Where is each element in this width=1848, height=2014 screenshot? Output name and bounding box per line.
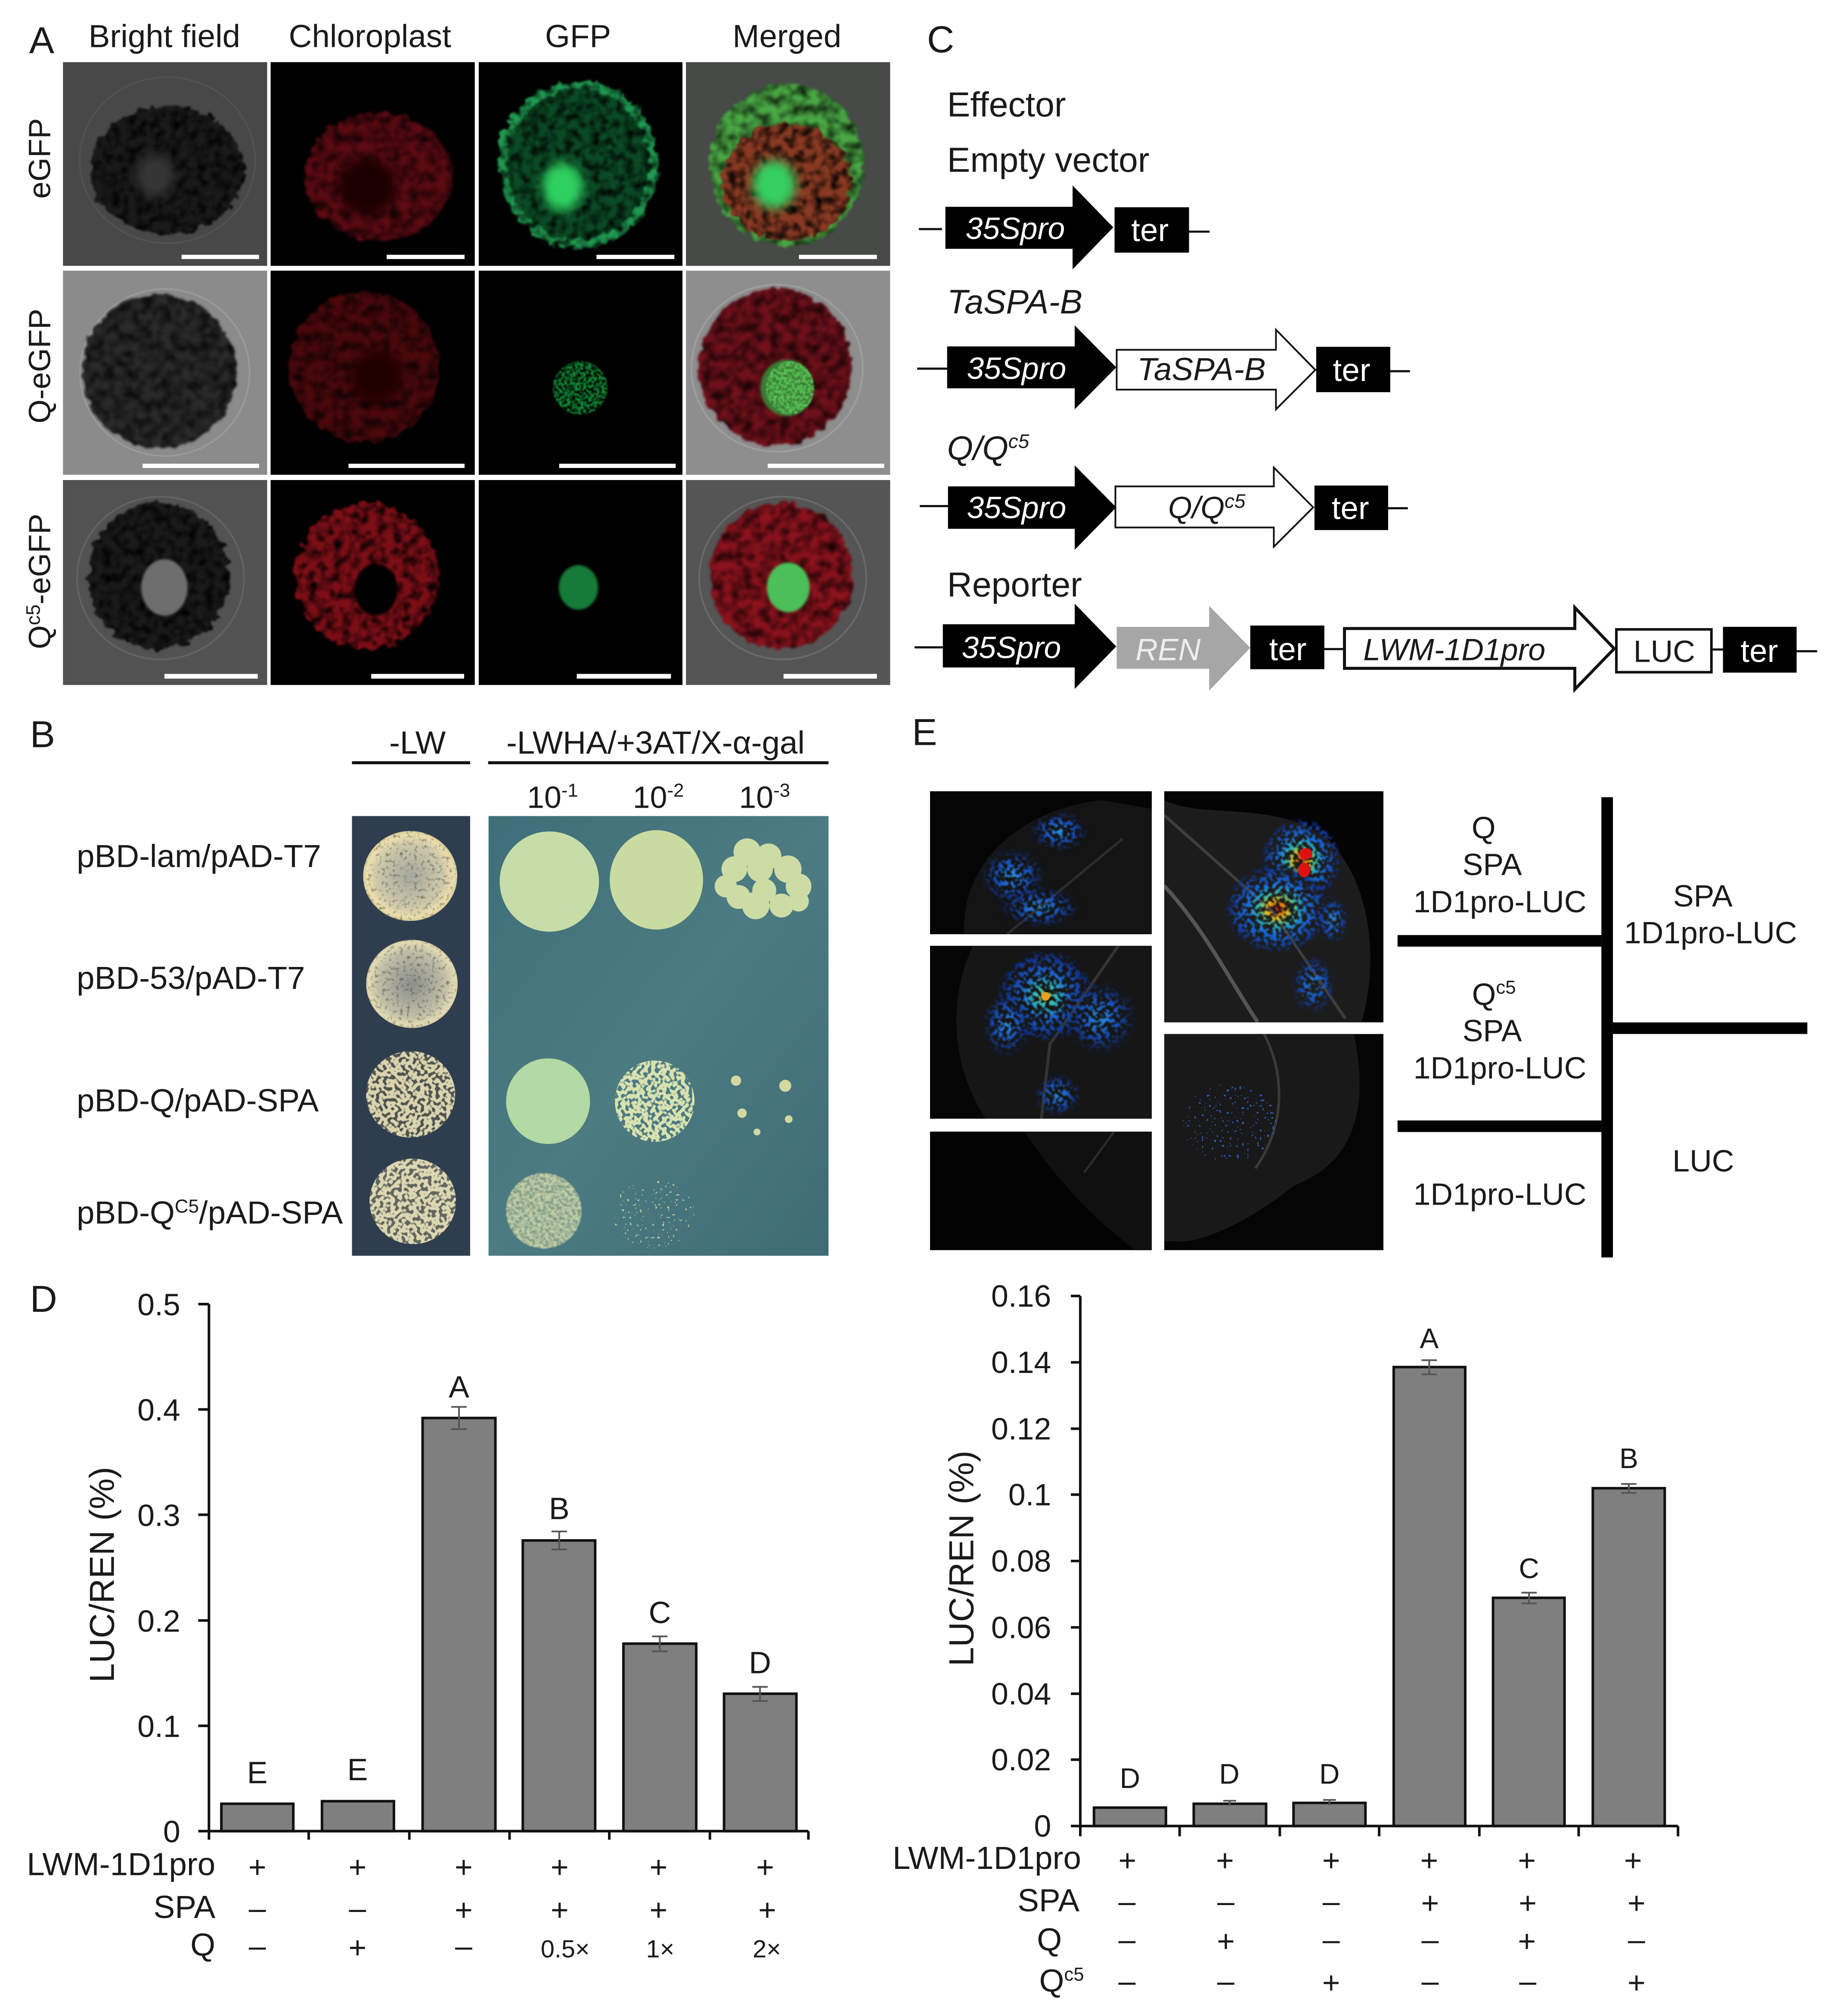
- construct: TaSPA-B: ter: [1333, 352, 1370, 388]
- construct: empty vector: 35Spro: [965, 211, 1065, 246]
- treatment table: 0.5×: [541, 1936, 590, 1963]
- heading: Q/Qc5: Q/Q: [947, 430, 1008, 467]
- significance letters: E: [347, 1753, 368, 1787]
- dilution label 10^-3: -3: [773, 780, 790, 801]
- treatment table: LWM-1D1pro: [893, 1840, 1081, 1876]
- micrograph: Qc5-eGFP GFP signal: [479, 480, 682, 685]
- error bars: [1223, 1360, 1637, 1806]
- y axis tick labels: 0.4: [137, 1393, 180, 1428]
- y axis tick labels: [991, 1279, 1051, 1844]
- label: Q SPA 1D1pro-LUC: SPA: [1463, 848, 1522, 882]
- significance letters: [1120, 1323, 1638, 1794]
- y axis tick labels: 0: [163, 1815, 180, 1849]
- treatment table: +: [455, 1850, 473, 1885]
- treatment table: +: [1421, 1886, 1439, 1921]
- construct: reporter: ter: [1740, 632, 1778, 669]
- micrograph: eGFP chloroplast: [270, 62, 475, 266]
- treatment table: +: [650, 1893, 667, 1927]
- underline -LWHA: [488, 761, 828, 764]
- dilution label 10^-2: -2: [667, 780, 684, 801]
- y axis title: LUC/REN (%): [83, 1467, 122, 1682]
- treatment table: 2×: [753, 1936, 781, 1963]
- treatment table: –: [1118, 1923, 1135, 1957]
- column heading: GFP: GFP: [545, 18, 611, 54]
- construct: TaSPA-B: 35Spro: [967, 351, 1066, 386]
- micrograph: eGFP bright field: [63, 62, 267, 266]
- micrograph: Qc5-eGFP bright field: [63, 480, 267, 685]
- label: Q SPA 1D1pro-LUC: [1414, 811, 1586, 919]
- treatment table: +: [1624, 1844, 1642, 1878]
- row label: pBD-Q/pAD-SPA: pBD-Q/pAD-SPA: [77, 1082, 319, 1119]
- treatment table: +: [1628, 1886, 1646, 1921]
- leaf image: 1D1pro-LUC: [930, 1131, 1152, 1250]
- heading: Q/Qc5: c5: [1008, 430, 1029, 452]
- significance letters: C: [1519, 1553, 1539, 1584]
- micrograph: eGFP GFP signal: [479, 62, 682, 266]
- y axis tick labels: 0.08: [991, 1544, 1051, 1579]
- treatment table: [893, 1840, 1646, 2000]
- construct: empty vector: ter: [1131, 212, 1169, 248]
- micrograph: Q-eGFP bright field: [63, 271, 267, 475]
- micrograph: Q-eGFP GFP signal: [479, 271, 682, 475]
- label: SPA 1D1pro-LUC: SPA: [1673, 879, 1733, 913]
- treatment table: –: [1519, 1964, 1536, 1999]
- leaf image: Qc5 SPA 1D1pro-LUC: [930, 946, 1152, 1119]
- row label: Qc5-eGFP: -eGFP: [22, 514, 57, 604]
- treatment table: –: [349, 1891, 366, 1926]
- significance letters: B: [1619, 1443, 1638, 1474]
- treatment table: +: [1118, 1844, 1136, 1878]
- panel D left: bar chart with Q titration: [27, 1288, 809, 1965]
- heading: -LWHA/+3AT/X-α-gal: -LWHA/+3AT/X-α-gal: [506, 724, 805, 760]
- row label: pBD-QC5/pAD-SPA: /pAD-SPA: [199, 1194, 343, 1230]
- treatment table: LWM-1D1pro: [27, 1846, 215, 1882]
- panel E: luciferase imaging of leaves: [912, 711, 1808, 1258]
- treatment table: +: [1322, 1966, 1340, 2000]
- y axis tick labels: 0.02: [991, 1743, 1051, 1777]
- label: SPA 1D1pro-LUC: [1624, 879, 1797, 950]
- y axis tick labels: 0.06: [991, 1611, 1051, 1645]
- label: SPA 1D1pro-LUC: 1D1pro-LUC: [1624, 916, 1797, 950]
- treatment table: –: [1118, 1964, 1135, 1999]
- row label: Q-eGFP: Q-eGFP: [22, 309, 57, 424]
- treatment table: c5: [1064, 1964, 1084, 1985]
- y axis tick labels: 0.16: [991, 1279, 1051, 1314]
- construct: reporter: ter: [1269, 631, 1307, 667]
- treatment table: +: [1322, 1844, 1340, 1878]
- row label: pBD-lam/pAD-T7: pBD-lam/pAD-T7: [77, 838, 321, 874]
- treatment table: SPA: [1017, 1882, 1079, 1918]
- panel letter A: A: [29, 19, 55, 61]
- micrograph: Q-eGFP chloroplast: [270, 271, 475, 475]
- construct: Q/Qc5: [920, 465, 1408, 550]
- bars: [221, 1418, 797, 1831]
- heading: Reporter: Reporter: [947, 565, 1082, 604]
- treatment table: –: [455, 1929, 472, 1964]
- panel A: protoplast localization micrographs: [22, 18, 890, 685]
- panel letter C: C: [927, 18, 954, 60]
- row label: eGFP: eGFP: [22, 118, 57, 198]
- panel letter E: E: [912, 711, 937, 753]
- treatment table: –: [1422, 1923, 1439, 1957]
- construct: reporter: LUC: [1634, 634, 1695, 669]
- construct: Q/Qc5: ter: [1332, 490, 1369, 526]
- y axis tick labels: 0.14: [991, 1345, 1051, 1380]
- treatment table: +: [455, 1893, 473, 1927]
- construct: Q/Qc5: Q/Q: [1168, 490, 1225, 525]
- treatment table: +: [1519, 1886, 1537, 1921]
- heading: -LW: -LW: [389, 724, 446, 760]
- row label: pBD-QC5/pAD-SPA: C5: [175, 1196, 199, 1217]
- micrograph: Qc5-eGFP merged: [686, 480, 890, 685]
- treatment table: +: [650, 1850, 667, 1885]
- axes: [1071, 1296, 1678, 1836]
- panel C: construct diagrams: [915, 18, 1817, 691]
- micrograph: eGFP merged: [686, 62, 890, 266]
- significance letters: D: [1219, 1758, 1240, 1790]
- treatment table: –: [249, 1891, 266, 1926]
- underline -LW: [352, 761, 470, 764]
- row label: Qc5-eGFP: Q: [22, 625, 57, 649]
- panel letter D: D: [30, 1278, 57, 1320]
- micrograph: Q-eGFP merged: [686, 271, 890, 475]
- row label: pBD-53/pAD-T7: pBD-53/pAD-T7: [77, 960, 305, 996]
- dilution label 10^-1: -1: [561, 780, 578, 801]
- treatment table: +: [1628, 1966, 1646, 2000]
- significance letters: E: [247, 1756, 268, 1790]
- treatment table: –: [1323, 1884, 1340, 1919]
- treatment table: [27, 1846, 781, 1965]
- y axis tick labels: [137, 1288, 180, 1849]
- construct: TaSPA-B: [917, 325, 1410, 409]
- column heading: Chloroplast: Chloroplast: [289, 18, 451, 54]
- panel letter B: B: [30, 713, 55, 755]
- significance letters: C: [649, 1596, 671, 1630]
- plate: -LWHA/+3AT/X-α-gal: [489, 816, 828, 1256]
- treatment table: +: [248, 1850, 267, 1885]
- treatment table: Q: [190, 1927, 215, 1963]
- treatment table: 1×: [646, 1936, 674, 1963]
- label: Qc5 SPA 1D1pro-LUC: [1414, 977, 1586, 1085]
- y axis title: LUC/REN (%): [942, 1450, 981, 1666]
- treatment table: –: [1422, 1964, 1439, 1999]
- treatment table: SPA: [153, 1889, 215, 1925]
- column heading: Bright field: Bright field: [89, 18, 240, 54]
- treatment table: –: [1118, 1884, 1135, 1919]
- treatment table: +: [348, 1931, 366, 1965]
- dilution label 10^-1: 10: [527, 781, 561, 815]
- y axis tick labels: 0.04: [991, 1677, 1051, 1711]
- significance letters: A: [449, 1370, 469, 1404]
- leaf image: SPA 1D1pro-LUC: [1164, 791, 1383, 1022]
- treatment table: +: [756, 1850, 774, 1885]
- treatment table: –: [249, 1929, 266, 1964]
- treatment table: +: [1217, 1924, 1235, 1959]
- treatment table: –: [1323, 1923, 1340, 1957]
- construct: reporter: LWM-1D1pro: [1363, 633, 1545, 667]
- label: 1D1pro-LUC: 1D1pro-LUC: [1414, 1177, 1586, 1211]
- treatment table: +: [551, 1893, 569, 1927]
- treatment table: +: [1518, 1924, 1536, 1959]
- significance letters: [247, 1370, 771, 1790]
- y axis tick labels: 0.1: [137, 1710, 180, 1744]
- row label: pBD-QC5/pAD-SPA: pBD-Q: [77, 1194, 175, 1230]
- treatment table: –: [1217, 1964, 1234, 1999]
- construct: Q/Qc5: 35Spro: [967, 490, 1066, 525]
- label: Qc5 SPA 1D1pro-LUC: Q: [1472, 977, 1496, 1012]
- significance letters: D: [749, 1645, 771, 1680]
- construct: TaSPA-B: TaSPA-B: [1137, 351, 1266, 387]
- y axis tick labels: 0.5: [137, 1288, 180, 1322]
- column heading: Merged: Merged: [732, 18, 841, 54]
- y axis tick labels: 0: [1034, 1809, 1051, 1844]
- sample layout divider lines: [1398, 797, 1808, 1258]
- dilution label 10^-2: 10: [633, 781, 667, 815]
- treatment table: +: [551, 1850, 569, 1885]
- leaf image: Q SPA 1D1pro-LUC: [930, 791, 1152, 934]
- label: Qc5 SPA 1D1pro-LUC: 1D1pro-LUC: [1414, 1051, 1586, 1085]
- label: LUC: LUC: [1672, 1144, 1734, 1178]
- construct: reporter: REN: [1135, 633, 1201, 667]
- significance letters: A: [1420, 1323, 1439, 1354]
- significance letters: D: [1120, 1763, 1140, 1794]
- label: Qc5 SPA 1D1pro-LUC: c5: [1496, 977, 1516, 998]
- treatment table: –: [1628, 1923, 1645, 1957]
- bars: [1094, 1367, 1665, 1826]
- row label: Qc5-eGFP: c5: [22, 604, 44, 625]
- heading: Effector: Effector: [947, 86, 1066, 124]
- label: Q SPA 1D1pro-LUC: 1D1pro-LUC: [1414, 885, 1586, 919]
- error bars: [451, 1407, 768, 1701]
- sparse colonies at 10^-3, row 3: [731, 1075, 793, 1135]
- label: Q SPA 1D1pro-LUC: Q: [1472, 811, 1496, 845]
- heading: Empty vector: Empty vector: [947, 141, 1150, 180]
- significance letters: D: [1319, 1758, 1339, 1790]
- treatment table: +: [1420, 1844, 1438, 1878]
- dilution label 10^-3: 10: [739, 781, 773, 815]
- treatment table: Q: [1039, 1962, 1064, 1999]
- leaf image: LUC: [1164, 1034, 1383, 1250]
- axes: [198, 1304, 809, 1840]
- treatment table: +: [1216, 1844, 1234, 1878]
- clustered colonies at 10^-3, row 1: [715, 838, 811, 919]
- treatment table: +: [348, 1850, 366, 1885]
- construct: reporter: 35Spro: [962, 631, 1061, 665]
- panel B: yeast two-hybrid plates: [30, 713, 828, 1256]
- heading: TaSPA-B: TaSPA-B: [947, 283, 1082, 321]
- label: Qc5 SPA 1D1pro-LUC: SPA: [1463, 1014, 1522, 1048]
- panel D right: bar chart with Q and Qc5: [893, 1279, 1678, 2000]
- significance letters: B: [549, 1491, 570, 1526]
- construct: reporter: [915, 604, 1817, 691]
- y axis tick labels: 0.2: [137, 1604, 180, 1639]
- construct: empty vector: [919, 186, 1209, 270]
- construct: Q/Qc5: c5: [1225, 490, 1246, 512]
- treatment table: –: [1217, 1884, 1234, 1919]
- treatment table: +: [1518, 1844, 1536, 1878]
- y axis tick labels: 0.12: [991, 1412, 1051, 1446]
- treatment table: Q: [1037, 1921, 1062, 1958]
- micrograph: Qc5-eGFP chloroplast: [270, 480, 475, 685]
- plate: -LW: [352, 816, 470, 1256]
- treatment table: +: [758, 1893, 776, 1927]
- y axis tick labels: 0.3: [137, 1498, 180, 1533]
- y axis tick labels: 0.1: [1008, 1478, 1051, 1512]
